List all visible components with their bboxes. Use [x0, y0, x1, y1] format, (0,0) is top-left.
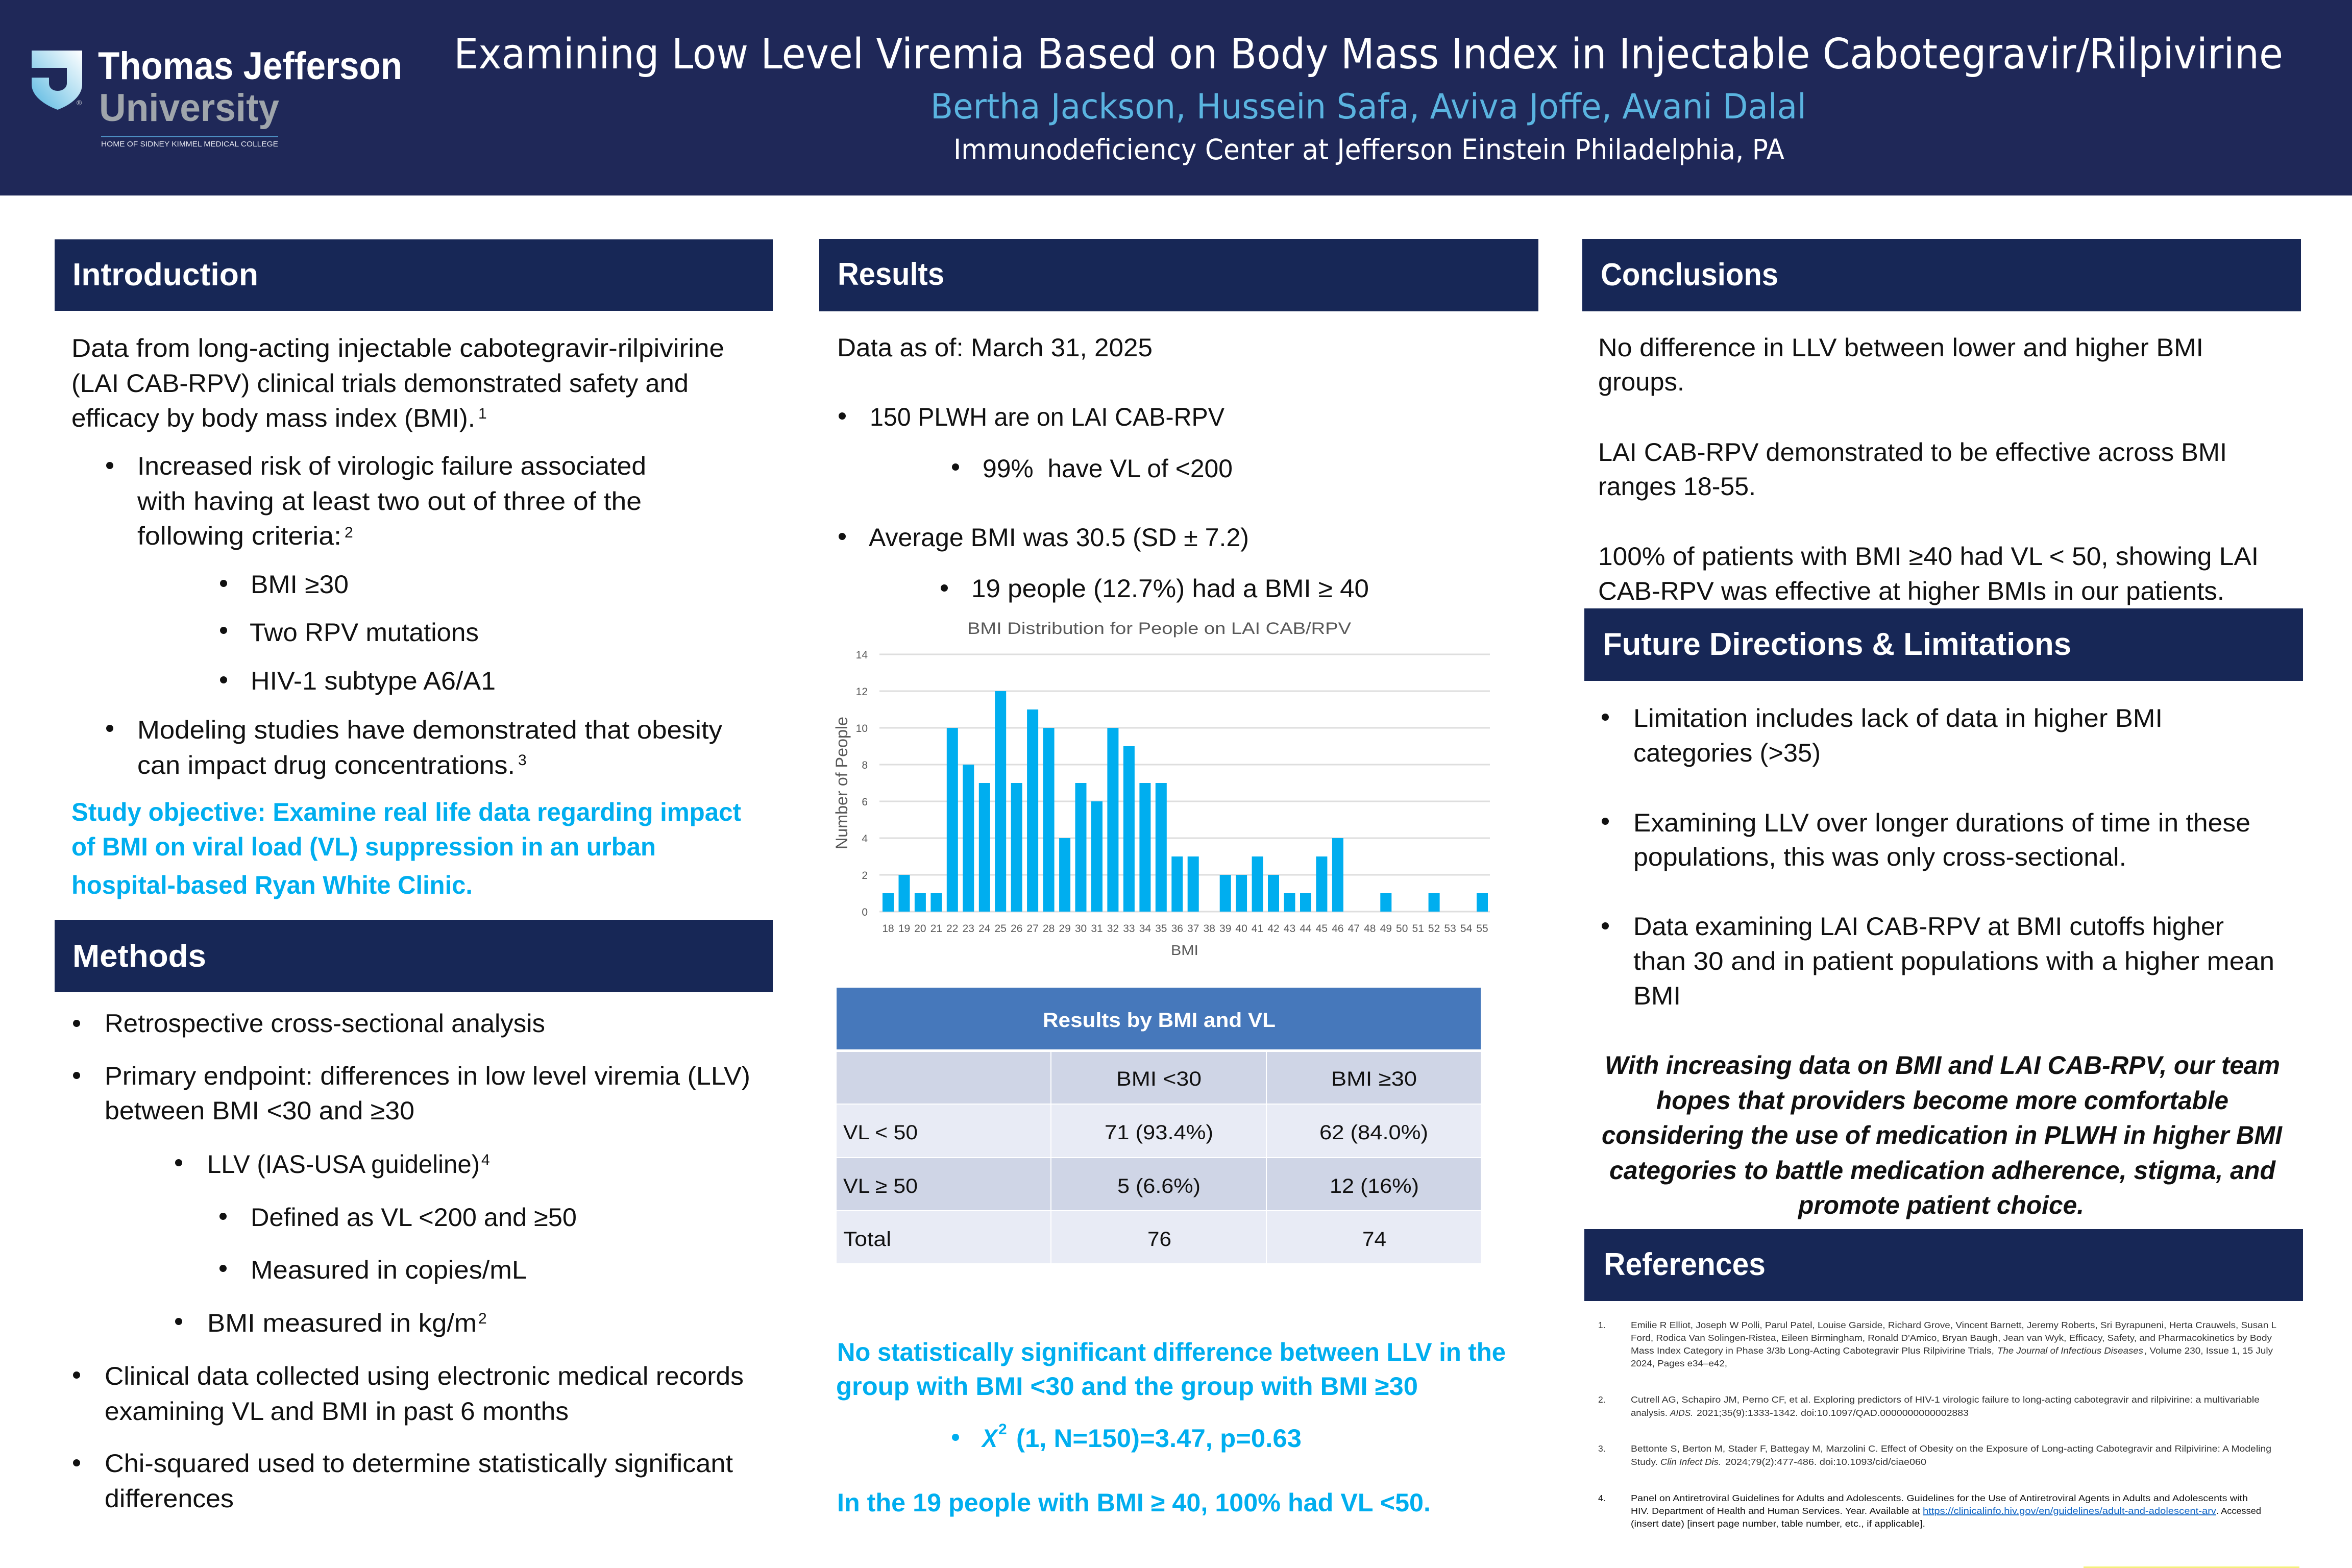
bar chart: BMI distribution: 54 — [1460, 923, 1473, 935]
text: introduction body — [71, 334, 724, 779]
table: results by BMI and VL: 5 (6.6%) — [1117, 1175, 1200, 1197]
text: results summary: Data as of: March 31, 2025 — [837, 333, 1153, 362]
text: introduction body: can impact drug concentrations. — [137, 751, 515, 779]
text: methods bullets — [73, 1009, 750, 1513]
bar chart: BMI distribution: 38 — [1204, 923, 1215, 935]
bar chart: BMI distribution: 21 — [930, 923, 942, 935]
bar chart: BMI distribution: 52 — [1428, 923, 1440, 935]
panel: references — [1584, 1229, 2303, 1529]
text: limitations bullets: categories (>35) — [1633, 739, 1821, 767]
text: reference 1: , Volume 230, Issue 1, 15 July — [2144, 1345, 2273, 1356]
text: limitations bullets: Limitation includes lack of data in higher BMI — [1633, 704, 2163, 732]
text: introduction body: 1 — [478, 405, 487, 422]
heading: methods: Methods — [72, 939, 206, 974]
text: reference 2: AIDS. — [1670, 1408, 1693, 1418]
text: limitations bullets: populations, this was only cross-sectional. — [1633, 843, 2126, 871]
text: methods bullets: Retrospective cross-sectional analysis — [105, 1009, 545, 1038]
heading: methods — [55, 920, 773, 992]
text: conclusions body: LAI CAB-RPV demonstrated to be effective across BMI — [1598, 438, 2227, 467]
text: results summary: 150 PLWH are on LAI CAB-RPV — [870, 403, 1225, 431]
logo: Thomas Jefferson University: Thomas Jefferson — [98, 44, 402, 88]
icon: J shield — [32, 51, 82, 110]
text: conclusions body: groups. — [1598, 368, 1684, 396]
text: methods bullets: LLV (IAS-USA guideline) — [207, 1150, 480, 1179]
text: introduction body: Data from long-acting injectable cabotegravir-rilpivirine — [71, 334, 724, 362]
callout: statistical findings: group with BMI <30 and the group with BMI ≥30 — [836, 1372, 1418, 1401]
affiliation: Immunodeficiency Center at Jefferson Einstein Philadelphia, PA — [953, 133, 1784, 166]
table: results by BMI and VL: VL ≥ 50 — [843, 1175, 918, 1197]
text: methods bullets: examining VL and BMI in past 6 months — [105, 1397, 569, 1426]
bar chart: BMI distribution: 2 — [862, 870, 868, 881]
bar chart: BMI distribution: 20 — [914, 923, 926, 935]
heading: results — [819, 239, 1538, 311]
text: methods bullets: Primary endpoint: differences in low level viremia (LLV) — [105, 1062, 750, 1090]
panel: introduction — [55, 239, 773, 899]
bar chart: BMI distribution: 47 — [1348, 923, 1360, 935]
bar chart: BMI distribution — [832, 619, 1490, 958]
text: reference 3: Bettonte S, Berton M, Stader F, Battegay M, Marzolini C. Effect of Obesity on the Exposure of Long-acting Cabotegravir and Rilpivirine: A Modeling — [1631, 1443, 2271, 1454]
bar chart: BMI distribution: 26 — [1011, 923, 1022, 935]
panel: future directions and limitations — [1584, 608, 2303, 1219]
text: reference 2: 2021;35(9):1333-1342. doi:10.1097/QAD.0000000000002883 — [1697, 1408, 1969, 1418]
text: reference 2: 2. — [1598, 1394, 1606, 1405]
heading: references: References — [1604, 1247, 1766, 1282]
text: introduction body: Increased risk of virologic failure associated — [137, 452, 646, 480]
bar chart: BMI distribution: 29 — [1059, 923, 1071, 935]
panel: results — [819, 239, 1538, 1517]
logo: Thomas Jefferson University — [32, 44, 402, 149]
text: reference 4: https://clinicalinfo.hiv.gov/en/guidelines/adult-and-adolescent-arv — [1923, 1506, 2216, 1516]
text: limitations bullets — [1602, 704, 2274, 1010]
header banner — [0, 0, 2352, 195]
text: introduction body: (LAI CAB-RPV) clinical trials demonstrated safety and — [71, 369, 689, 398]
logo: Thomas Jefferson University: ® — [77, 99, 82, 107]
bar chart: BMI distribution: Number of People — [832, 717, 851, 849]
text: results summary — [837, 333, 1369, 603]
heading: introduction — [55, 239, 773, 311]
table: results by BMI and VL: 12 (16%) — [1330, 1175, 1419, 1197]
logo: Thomas Jefferson University: HOME OF SIDNEY KIMMEL MEDICAL COLLEGE — [101, 140, 278, 149]
text: reference 1: 1. — [1598, 1320, 1606, 1330]
text: methods bullets: Chi-squared used to determine statistically significant — [105, 1449, 733, 1478]
bar chart: BMI distribution: 4 — [862, 833, 868, 845]
text: methods bullets: Measured in copies/mL — [251, 1256, 527, 1284]
text: reference 4: (insert date) [insert page number, table number, etc., if applicable]. — [1631, 1518, 1925, 1529]
bar chart: BMI distribution: 49 — [1380, 923, 1392, 935]
text: reference 2: Cutrell AG, Schapiro JM, Perno CF, et al. Exploring predictors of HIV-1 virologic failure to long-acting cabotegravir and rilpivirine: a multivariable — [1631, 1394, 2260, 1405]
callout: study objective: of BMI on viral load (VL) suppression in an urban — [71, 832, 656, 861]
text: introduction body: following criteria: — [137, 522, 341, 550]
callout: closing statement: hopes that providers become more comfortable — [1656, 1086, 2228, 1115]
bar chart: BMI distribution: 25 — [995, 923, 1007, 935]
text: introduction body: 2 — [345, 524, 353, 541]
callout: closing statement: categories to battle medication adherence, stigma, and — [1609, 1156, 2276, 1185]
text: reference 1: The Journal of Infectious Diseases — [1997, 1345, 2143, 1356]
table: results by BMI and VL — [837, 988, 1481, 1263]
bar chart: BMI distribution: 44 — [1300, 923, 1312, 935]
callout: closing statement: promote patient choice. — [1797, 1191, 2084, 1219]
panel: conclusions — [1582, 239, 2301, 605]
text: conclusions body: No difference in LLV between lower and higher BMI — [1598, 333, 2203, 362]
bar chart: BMI distribution: 42 — [1267, 923, 1280, 935]
text: introduction body: Two RPV mutations — [250, 618, 479, 647]
text: reference 3: 2024;79(2):477-486. doi:10.1093/cid/ciae060 — [1725, 1457, 1926, 1467]
callout: closing statement: With increasing data on BMI and LAI CAB-RPV, our team — [1605, 1051, 2280, 1080]
text: methods bullets: between BMI <30 and ≥30 — [105, 1096, 414, 1125]
callout: closing statement — [1602, 1051, 2283, 1219]
bar chart: BMI distribution: 22 — [946, 923, 958, 935]
bar chart: BMI distribution: 27 — [1026, 923, 1039, 935]
text: methods bullets: differences — [105, 1484, 234, 1513]
yellow strip at page bottom — [2084, 1566, 2299, 1568]
text: reference 4: HIV. Department of Health and Human Services. Year. Available at — [1631, 1506, 1920, 1516]
text: limitations bullets: Data examining LAI CAB-RPV at BMI cutoffs higher — [1633, 912, 2224, 941]
text: reference 4: 4. — [1598, 1493, 1606, 1503]
text: reference 2: analysis. — [1631, 1408, 1668, 1418]
text: introduction body: 3 — [518, 752, 527, 769]
bar chart: BMI distribution: 37 — [1187, 923, 1199, 935]
callout: study objective — [71, 798, 741, 899]
table: results by BMI and VL: VL < 50 — [843, 1121, 918, 1144]
text: introduction body: Modeling studies have demonstrated that obesity — [137, 716, 722, 744]
text: reference 4 — [1598, 1493, 2261, 1529]
text: introduction body: BMI ≥30 — [251, 570, 349, 599]
heading: future directions — [1584, 608, 2303, 681]
callout: statistical findings: (1, N=150)=3.47, p=0.63 — [1016, 1424, 1302, 1453]
panel: methods — [55, 920, 773, 1513]
bar chart: BMI distribution: 10 — [856, 723, 868, 734]
text: reference 3: 3. — [1598, 1443, 1606, 1454]
text: methods bullets: BMI measured in kg/m — [207, 1309, 477, 1337]
bar chart: BMI distribution: 53 — [1444, 923, 1456, 935]
text: methods bullets: Clinical data collected using electronic medical records — [105, 1362, 744, 1390]
text: conclusions body: CAB-RPV was effective at higher BMIs in our patients. — [1598, 577, 2224, 605]
text: reference 4: Panel on Antiretroviral Guidelines for Adults and Adolescents. Guidelines for the Use of Antiretroviral Agents in Adults and Adolescents with — [1631, 1493, 2248, 1503]
text: reference 4: . Accessed — [2216, 1506, 2261, 1516]
text: conclusions body: 100% of patients with BMI ≥40 had VL < 50, showing LAI — [1598, 542, 2259, 571]
text: limitations bullets: Examining LLV over longer durations of time in these — [1633, 808, 2250, 837]
text: limitations bullets: BMI — [1633, 982, 1681, 1010]
text: reference 1: 2024, Pages e34–e42, — [1631, 1358, 1727, 1368]
bar chart: BMI distribution: 19 — [898, 923, 910, 935]
text: reference 2 — [1598, 1394, 2260, 1418]
text: conclusions body: ranges 18-55. — [1598, 472, 1756, 501]
text: reference 1: Mass Index Category in Phase 3/3b Long-Acting Cabotegravir Plus Rilpivirine Trials, — [1631, 1345, 1994, 1356]
bar chart: BMI distribution: 45 — [1316, 923, 1328, 935]
bar chart: BMI distribution: 33 — [1123, 923, 1135, 935]
bar chart: BMI distribution: 31 — [1091, 923, 1103, 935]
callout: statistical findings: In the 19 people with BMI ≥ 40, 100% had VL <50. — [837, 1488, 1431, 1517]
callout: statistical findings: No statistically significant difference between LLV in the — [837, 1338, 1506, 1366]
table: results by BMI and VL: Results by BMI and VL — [1043, 1009, 1276, 1032]
table: results by BMI and VL: 62 (84.0%) — [1319, 1121, 1428, 1144]
bar chart: BMI distribution: 51 — [1412, 923, 1424, 935]
text: reference 1: Ford, Rodica Van Solingen-Ristea, Eileen Birmingham, Ronald D'Amico, Bryan Baugh, Jean van Wyk, Efficacy, Safety, and Pharmacokinetics by Body — [1631, 1333, 2272, 1343]
text: methods bullets: 2 — [478, 1310, 487, 1327]
callout: statistical findings — [836, 1338, 1506, 1517]
text: methods bullets: 4 — [481, 1152, 490, 1168]
bar chart: BMI distribution: 35 — [1155, 923, 1167, 935]
heading: future directions: Future Directions & Limitations — [1603, 627, 2071, 662]
callout: statistical findings: X — [981, 1424, 998, 1453]
callout: study objective: Study objective: Examine real life data regarding impact — [71, 798, 741, 826]
bar chart: BMI distribution: BMI — [1171, 942, 1198, 958]
text: results summary: 99% have VL of <200 — [983, 454, 1233, 483]
bar chart: BMI distribution: 40 — [1235, 923, 1247, 935]
bar chart: BMI distribution: 36 — [1171, 923, 1183, 935]
table: results by BMI and VL: Total — [843, 1228, 891, 1251]
logo: Thomas Jefferson University: University — [99, 86, 279, 130]
bar chart: BMI distribution: 55 — [1476, 923, 1488, 935]
text: introduction body: with having at least two out of three of the — [137, 487, 642, 516]
text: methods bullets: Defined as VL <200 and ≥50 — [251, 1203, 577, 1232]
text: reference 3 — [1598, 1443, 2271, 1467]
bar chart: BMI distribution: 0 — [862, 906, 868, 918]
heading: references — [1584, 1229, 2303, 1301]
text: reference 3: Study. — [1631, 1457, 1658, 1467]
bar chart: BMI distribution: 30 — [1075, 923, 1087, 935]
bar chart: BMI distribution: 23 — [963, 923, 974, 935]
authors: Bertha Jackson, Hussein Safa, Aviva Joffe, Avani Dalal — [930, 87, 1806, 127]
bar chart: BMI distribution: 41 — [1252, 923, 1263, 935]
text: limitations bullets: than 30 and in patient populations with a higher mean — [1633, 947, 2274, 975]
heading: conclusions: Conclusions — [1601, 257, 1778, 292]
callout: statistical findings: 2 — [998, 1421, 1007, 1438]
bar chart: BMI distribution: 46 — [1332, 923, 1344, 935]
table: results by BMI and VL: 74 — [1362, 1228, 1386, 1251]
heading: results: Results — [838, 257, 944, 292]
bar chart: BMI distribution: 8 — [862, 760, 868, 771]
text: reference 3: Clin Infect Dis. — [1660, 1457, 1721, 1467]
bar chart: BMI distribution: 32 — [1107, 923, 1119, 935]
bar chart: BMI distribution: 48 — [1364, 923, 1376, 935]
text: results summary: Average BMI was 30.5 (SD ± 7.2) — [869, 523, 1249, 552]
callout: closing statement: considering the use of medication in PLWH in higher BMI — [1602, 1121, 2283, 1149]
bar chart: BMI distribution: 6 — [862, 796, 868, 808]
bar chart: BMI distribution: 28 — [1043, 923, 1055, 935]
bar chart: BMI distribution: 18 — [882, 923, 894, 935]
bar chart: BMI distribution: 14 — [856, 649, 868, 661]
bar chart: BMI distribution: 12 — [856, 686, 868, 698]
text: results summary: 19 people (12.7%) had a BMI ≥ 40 — [971, 574, 1369, 603]
callout: study objective: hospital-based Ryan White Clinic. — [71, 871, 473, 899]
text: introduction body: HIV-1 subtype A6/A1 — [251, 667, 496, 695]
bar chart: BMI distribution: 34 — [1139, 923, 1151, 935]
bar chart: BMI distribution: 39 — [1219, 923, 1231, 935]
text: conclusions body — [1598, 333, 2259, 605]
text: reference 1 — [1598, 1320, 2276, 1368]
table: results by BMI and VL: BMI ≥30 — [1331, 1068, 1417, 1090]
table: results by BMI and VL: 76 — [1147, 1228, 1171, 1251]
bar chart: BMI distribution: 43 — [1284, 923, 1295, 935]
table: results by BMI and VL: 71 (93.4%) — [1105, 1121, 1213, 1144]
heading: introduction: Introduction — [72, 257, 258, 292]
bar chart: BMI distribution: 24 — [978, 923, 991, 935]
text: reference 1: Emilie R Elliot, Joseph W Polli, Parul Patel, Louise Garside, Richard Grove, Vincent Barnett, Jeremy Roberts, Sri Byrapuneni, Herta Crauwels, Susan L — [1631, 1320, 2276, 1330]
bar chart: BMI distribution: BMI Distribution for People on LAI CAB/RPV — [967, 619, 1352, 638]
text: introduction body: efficacy by body mass index (BMI). — [71, 404, 475, 432]
bar chart: BMI distribution: 50 — [1396, 923, 1408, 935]
heading: conclusions — [1582, 239, 2301, 311]
table: results by BMI and VL: BMI <30 — [1116, 1068, 1202, 1090]
